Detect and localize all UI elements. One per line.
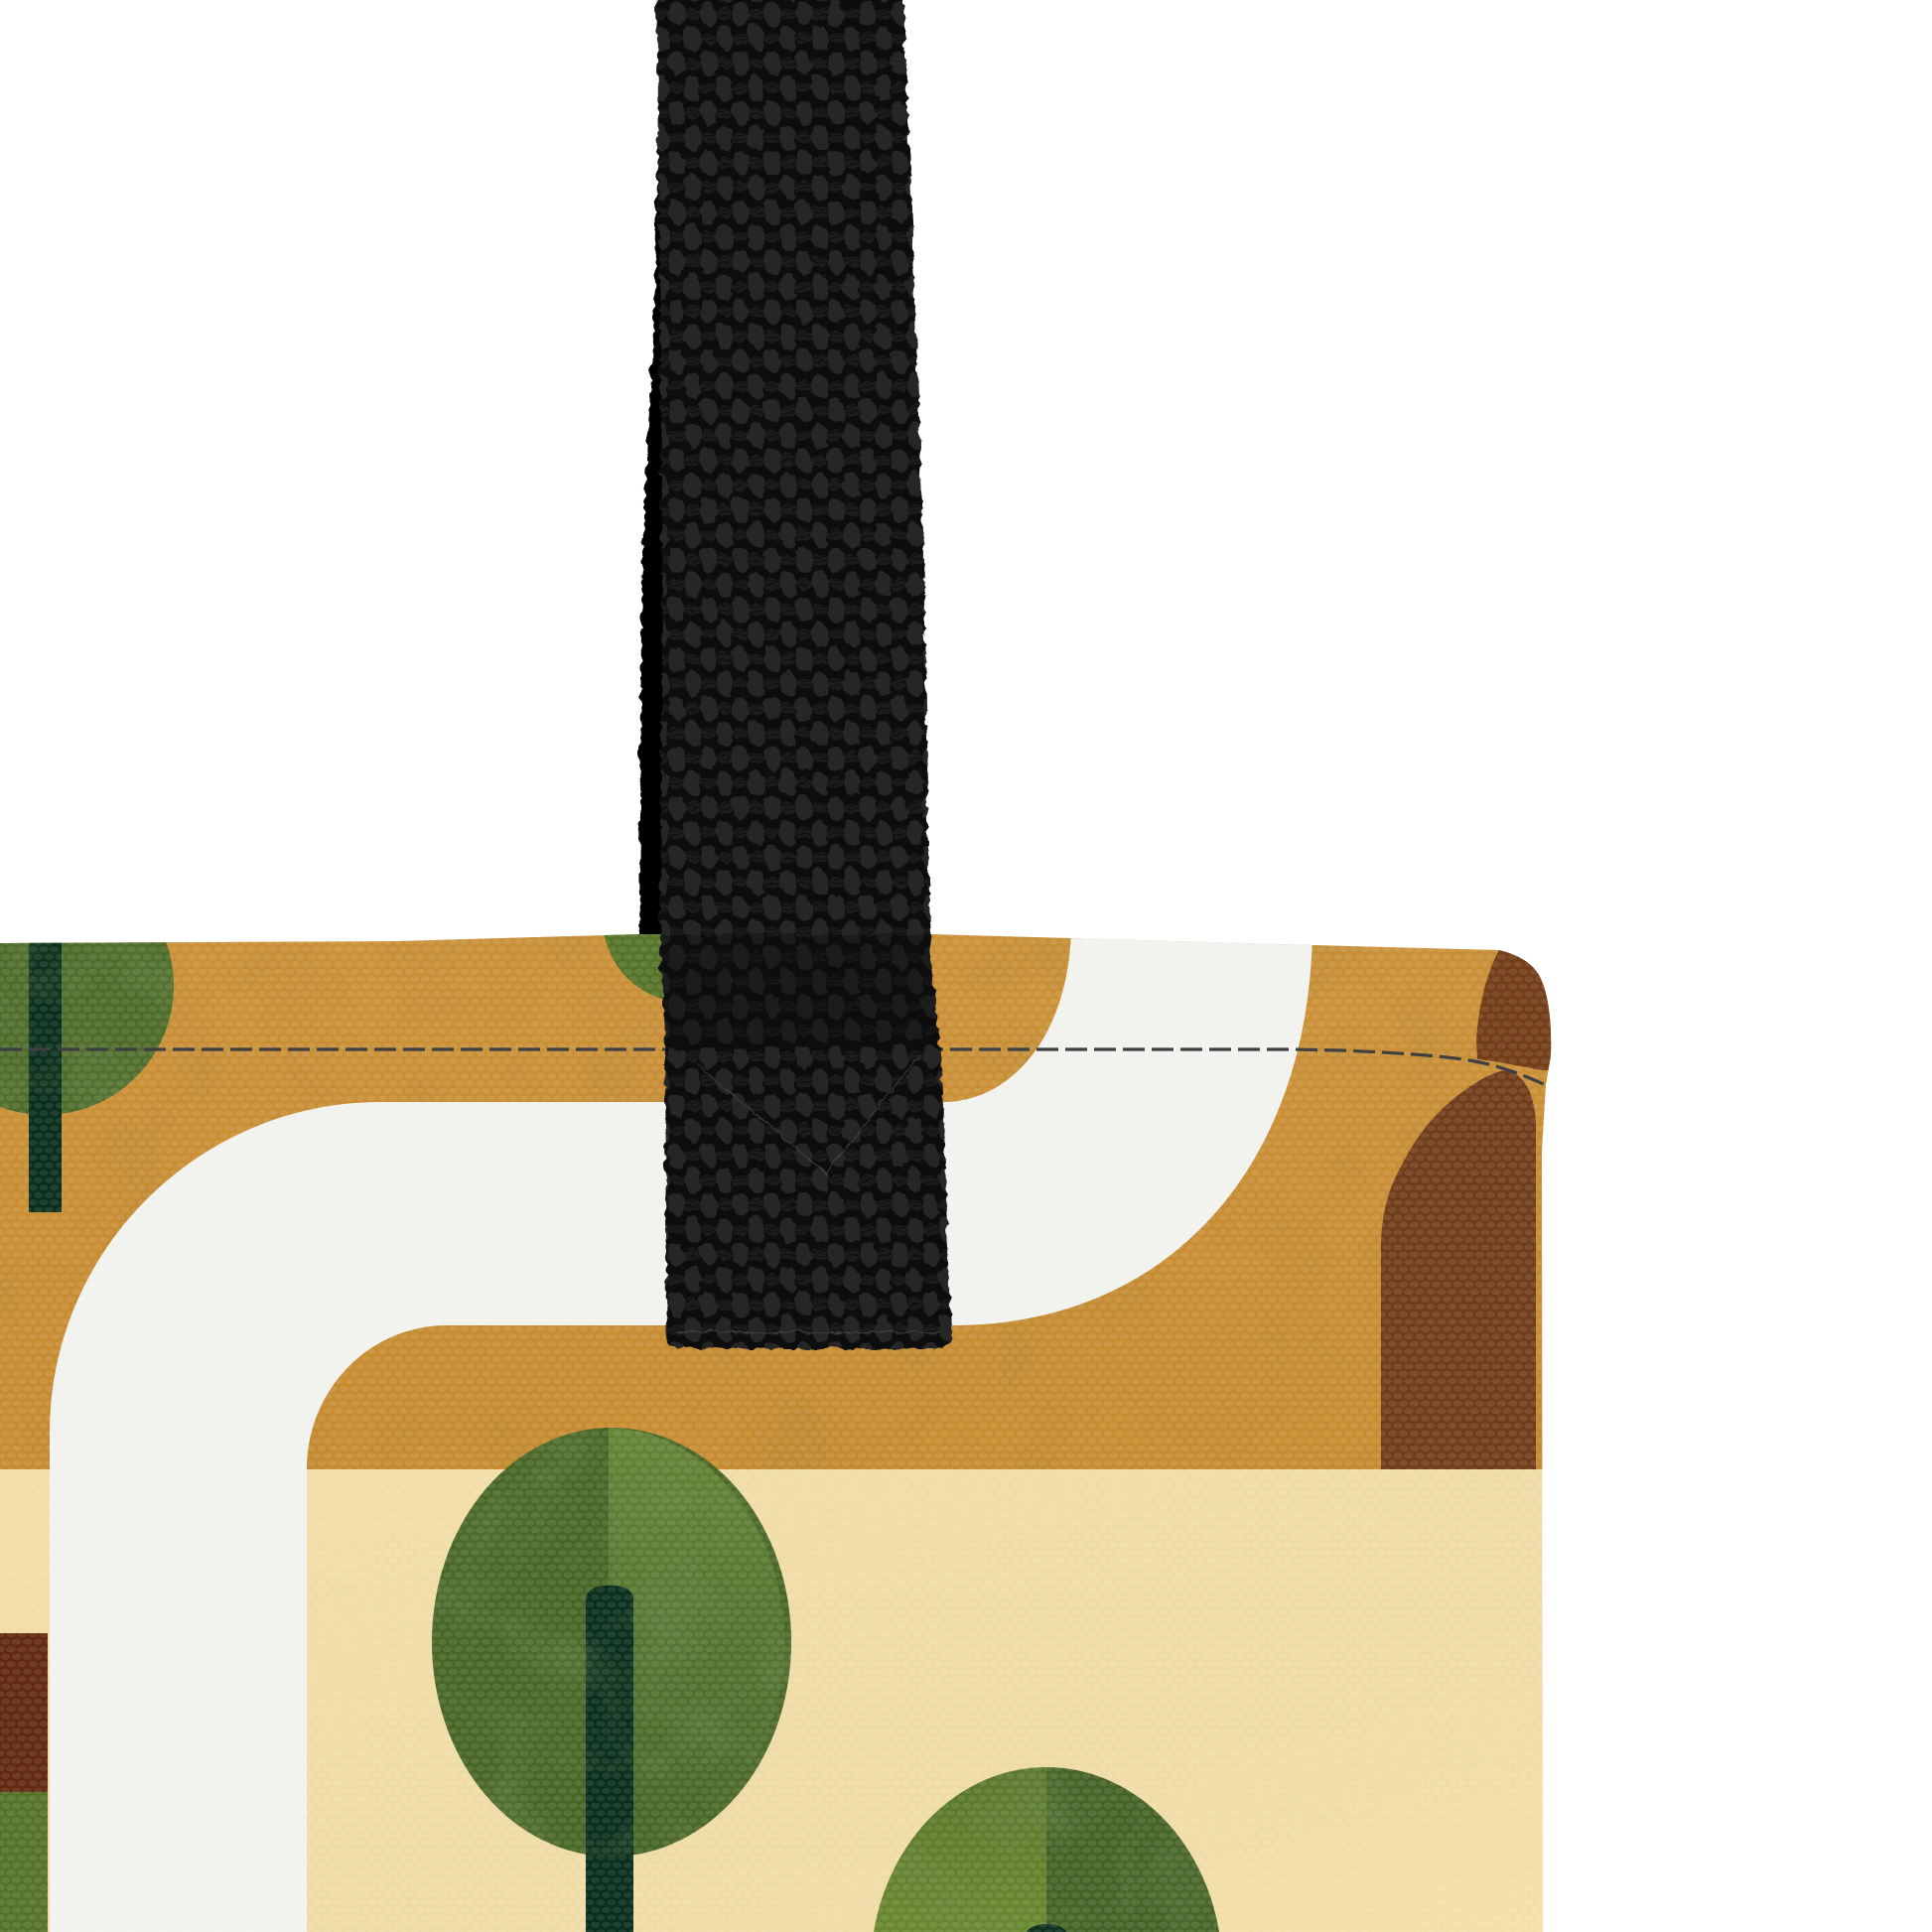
tree: small behind strap <box>604 934 665 999</box>
strap back layer (folded shadow) <box>637 0 715 938</box>
sand mottling <box>126 935 1543 1467</box>
brown bottle shape: lower <box>1381 1070 1536 1469</box>
tree: centre <box>432 1428 791 1932</box>
white curved road <box>50 923 1312 1932</box>
tree: top left <box>0 942 174 1212</box>
strap: darker fold band <box>658 933 937 1044</box>
top stitching <box>0 1049 1546 1085</box>
strap: cross stitching <box>675 1052 938 1330</box>
tree: lower right <box>874 1767 1219 1932</box>
cream lower panel <box>0 1469 1588 1932</box>
sand band <box>0 923 1588 1469</box>
bag body <box>0 934 1551 1932</box>
canvas weave texture <box>0 923 1588 1932</box>
strap: black webbing handle <box>655 0 950 1347</box>
green block: left edge <box>0 1792 48 1932</box>
strap: sewn flap fold <box>663 1040 936 1045</box>
brown block: left edge <box>0 1633 48 1792</box>
tree mottling <box>29 943 1174 1928</box>
brown bottle shape: upper <box>1476 950 1551 1070</box>
